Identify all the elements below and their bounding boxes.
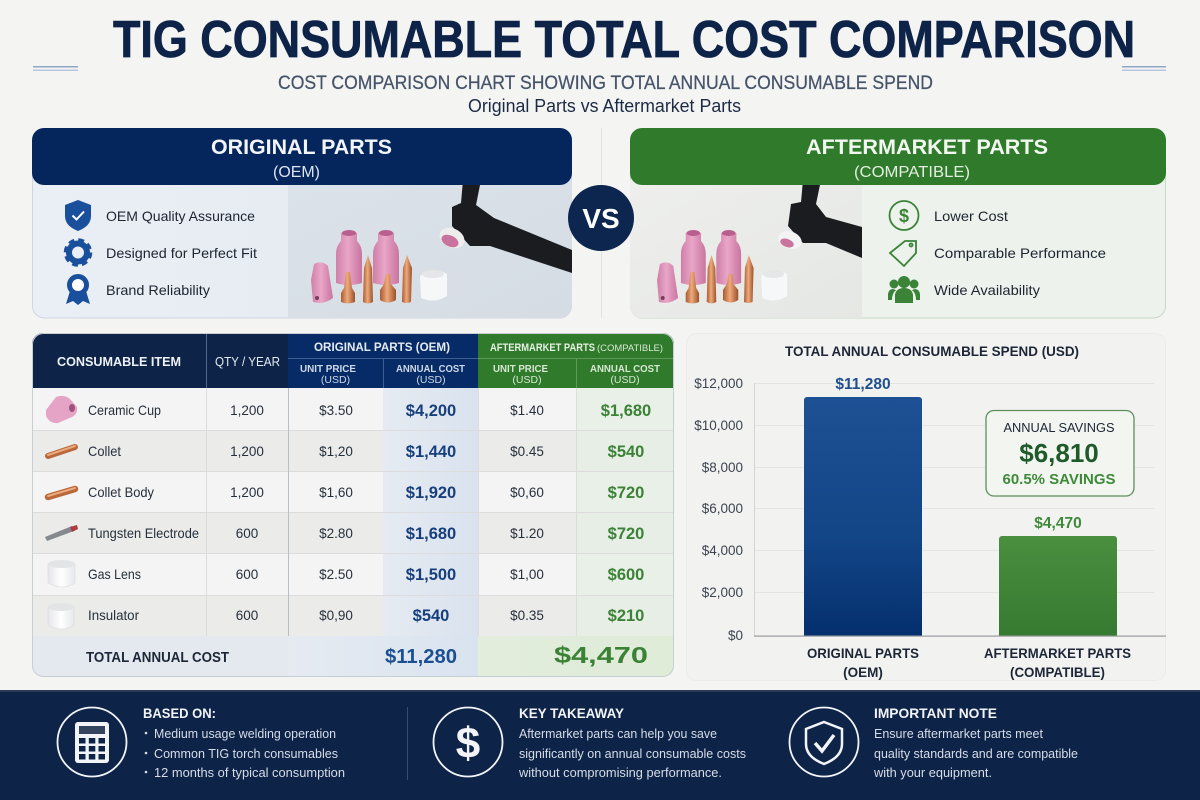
VS badge bbox=[568, 185, 634, 251]
photo: original parts and torch bbox=[288, 180, 572, 318]
icon: collet bbox=[48, 446, 75, 456]
footer band bbox=[0, 690, 1200, 800]
text: based on: BASED ON: bbox=[143, 705, 216, 721]
row: collet body: Collet Body bbox=[88, 484, 154, 500]
header: aftermarket parts bbox=[630, 128, 1166, 185]
text: important note: quality standards and are compatible bbox=[874, 746, 1078, 761]
row: collet body: $0,60 bbox=[510, 485, 544, 500]
row: ceramic cup: $1,680 bbox=[601, 402, 651, 420]
text: based on bbox=[143, 705, 345, 780]
row: tungsten electrode: $2.80 bbox=[319, 526, 353, 541]
row: gas lens bbox=[48, 560, 644, 587]
text: key takeaway: KEY TAKEAWAY bbox=[519, 705, 625, 721]
table header bbox=[57, 340, 663, 386]
callout: annual savings: ANNUAL SAVINGS bbox=[1004, 420, 1115, 435]
text: designed for perfect fit: Designed for Perfect Fit bbox=[106, 245, 257, 261]
icon: calculator bbox=[58, 708, 126, 776]
axis label: aftermarket parts: (COMPATIBLE) bbox=[1010, 665, 1105, 680]
callout: annual savings: 60.5% SAVINGS bbox=[1002, 471, 1116, 488]
row: collet: $0.45 bbox=[510, 444, 544, 459]
row: gas lens: $1,00 bbox=[510, 567, 544, 582]
row: gas lens: 600 bbox=[236, 567, 258, 582]
y axis labels: $2,000 bbox=[702, 585, 743, 600]
header: aftermarket parts: AFTERMARKET PARTS bbox=[806, 135, 1048, 159]
table header: ORIGINAL PARTS (OEM) bbox=[314, 340, 450, 354]
row: collet body bbox=[48, 484, 644, 502]
row: total annual cost: TOTAL ANNUAL COST bbox=[86, 650, 229, 666]
text: important note bbox=[873, 705, 1078, 780]
text: comparable performance: Comparable Performance bbox=[934, 245, 1106, 261]
row: tungsten electrode: $720 bbox=[608, 525, 644, 543]
row: insulator: $540 bbox=[413, 607, 449, 625]
row: tungsten electrode: $1.20 bbox=[510, 526, 544, 541]
row: ceramic cup: Ceramic Cup bbox=[88, 402, 161, 418]
icon: collet body bbox=[48, 488, 75, 497]
row: tungsten electrode: Tungsten Electrode bbox=[88, 525, 199, 541]
row: total annual cost bbox=[86, 642, 648, 668]
bar chart: total annual consumable spend bbox=[686, 334, 1166, 680]
header: original parts: ORIGINAL PARTS bbox=[211, 135, 392, 159]
y axis labels: $0 bbox=[728, 628, 743, 643]
value: original parts: $11,280 bbox=[835, 376, 891, 393]
row: collet: 1,200 bbox=[230, 444, 264, 459]
header: aftermarket parts: (COMPATIBLE) bbox=[854, 164, 970, 181]
table header: (USD) bbox=[321, 374, 350, 386]
text: based on: 12 months of typical consumption bbox=[154, 765, 345, 780]
table header: UNIT PRICE bbox=[493, 363, 548, 375]
row: collet body: $720 bbox=[608, 484, 644, 502]
bar: original parts bbox=[804, 397, 922, 636]
photo: aftermarket parts and torch bbox=[630, 180, 862, 318]
header: original parts bbox=[32, 128, 572, 185]
text: key takeaway: significantly on annual consumable costs bbox=[519, 746, 746, 761]
icon: dollar circle: $ bbox=[899, 206, 909, 226]
text: based on: Common TIG torch consumables bbox=[154, 746, 338, 761]
text: key takeaway: Aftermarket parts can help you save bbox=[519, 726, 717, 741]
row: ceramic cup: $1.40 bbox=[510, 403, 544, 418]
row: insulator bbox=[48, 603, 644, 629]
row: insulator: $0,90 bbox=[319, 608, 353, 623]
icon: tungsten electrode bbox=[45, 525, 78, 541]
row: insulator: $210 bbox=[608, 607, 644, 625]
row: collet body: $1,60 bbox=[319, 485, 353, 500]
table header: UNIT PRICE bbox=[300, 363, 356, 375]
row: ceramic cup: $4,200 bbox=[406, 402, 456, 420]
axis label: aftermarket parts bbox=[984, 645, 1131, 680]
icon: dollar circle bbox=[890, 201, 918, 230]
text: based on: Medium usage welding operation bbox=[154, 726, 336, 741]
row: tungsten electrode: $1,680 bbox=[406, 525, 456, 543]
header: original parts: (OEM) bbox=[273, 164, 320, 181]
row: ceramic cup: 1,200 bbox=[230, 403, 264, 418]
icon: gear bbox=[66, 240, 90, 265]
table header: (USD) bbox=[512, 374, 542, 386]
value: aftermarket parts: $4,470 bbox=[1034, 515, 1082, 532]
row: total annual cost: $4,470 bbox=[554, 642, 648, 668]
row: collet body: $1,920 bbox=[406, 484, 456, 502]
text: wide availability: Wide Availability bbox=[934, 282, 1040, 298]
icon: shield check bbox=[65, 200, 91, 231]
icon: insulator bbox=[48, 603, 74, 629]
subtitle second line: Original Parts vs Aftermarket Parts bbox=[468, 96, 741, 116]
y axis labels: $12,000 bbox=[694, 376, 743, 391]
icon: shield check bbox=[790, 708, 858, 776]
row: gas lens: $600 bbox=[608, 566, 644, 584]
icon: people bbox=[888, 276, 920, 303]
row: gas lens: $1,500 bbox=[406, 566, 456, 584]
table header: QTY / YEAR bbox=[215, 354, 280, 369]
icon: gas lens bbox=[48, 560, 75, 587]
table header: AFTERMARKET PARTS bbox=[490, 342, 595, 354]
VS badge: VS bbox=[582, 203, 620, 234]
row: insulator: 600 bbox=[236, 608, 258, 623]
row: tungsten electrode bbox=[45, 525, 644, 543]
y axis labels: $6,000 bbox=[702, 501, 743, 516]
table header: (COMPATIBLE) bbox=[597, 343, 663, 354]
text: important note: Ensure aftermarket parts meet bbox=[874, 726, 1043, 741]
table header: ANNUAL COST bbox=[590, 363, 661, 375]
y axis labels: $4,000 bbox=[702, 543, 743, 558]
icon: price tag bbox=[890, 241, 916, 266]
row: collet: $1,20 bbox=[319, 444, 353, 459]
row: total annual cost: $11,280 bbox=[385, 646, 457, 668]
row: gas lens: $2.50 bbox=[319, 567, 353, 582]
callout: annual savings: $6,810 bbox=[1019, 438, 1099, 468]
row: tungsten electrode: 600 bbox=[236, 526, 258, 541]
callout: annual savings bbox=[986, 410, 1134, 496]
row: insulator: Insulator bbox=[88, 607, 139, 623]
table header: (USD) bbox=[610, 374, 640, 386]
panel: aftermarket parts bbox=[630, 128, 1166, 318]
text: lower cost: Lower Cost bbox=[934, 208, 1008, 224]
row: collet bbox=[48, 443, 644, 461]
icon: dollar: $ bbox=[456, 719, 480, 768]
icon: ceramic cup bbox=[46, 396, 77, 423]
text: important note: with your equipment. bbox=[873, 765, 992, 780]
y axis labels: $8,000 bbox=[702, 460, 743, 475]
text: brand reliability: Brand Reliability bbox=[106, 282, 210, 298]
table header: CONSUMABLE ITEM bbox=[57, 354, 181, 369]
row: collet: $1,440 bbox=[406, 443, 456, 461]
y axis labels bbox=[694, 376, 743, 643]
text: key takeaway: without compromising performance. bbox=[518, 765, 722, 780]
row: collet body: 1,200 bbox=[230, 485, 264, 500]
subtitle: COST COMPARISON CHART SHOWING TOTAL ANNUAL CONSUMABLE SPEND bbox=[278, 73, 933, 94]
chart title: TOTAL ANNUAL CONSUMABLE SPEND (USD) bbox=[785, 343, 1079, 359]
axis label: original parts: ORIGINAL PARTS bbox=[807, 645, 919, 661]
axis label: original parts bbox=[807, 645, 919, 680]
row: collet: $540 bbox=[608, 443, 644, 461]
axis label: aftermarket parts: AFTERMARKET PARTS bbox=[984, 645, 1131, 661]
table header: (USD) bbox=[416, 374, 446, 386]
panel: original parts bbox=[32, 128, 572, 318]
bar: aftermarket parts bbox=[999, 536, 1117, 636]
row: insulator: $0.35 bbox=[510, 608, 544, 623]
table header: ANNUAL COST bbox=[396, 363, 466, 375]
y axis labels: $10,000 bbox=[694, 418, 743, 433]
row: gas lens: Gas Lens bbox=[88, 566, 141, 582]
icon: dollar bbox=[434, 708, 502, 776]
row: ceramic cup bbox=[46, 396, 651, 423]
text: important note: IMPORTANT NOTE bbox=[874, 705, 997, 721]
axis label: original parts: (OEM) bbox=[843, 665, 883, 680]
text: key takeaway bbox=[518, 705, 746, 780]
comparison table bbox=[32, 333, 674, 677]
row: ceramic cup: $3.50 bbox=[319, 403, 353, 418]
text: OEM quality assurance: OEM Quality Assurance bbox=[106, 208, 255, 224]
icon: ribbon bbox=[66, 276, 90, 305]
row: collet: Collet bbox=[88, 443, 121, 459]
